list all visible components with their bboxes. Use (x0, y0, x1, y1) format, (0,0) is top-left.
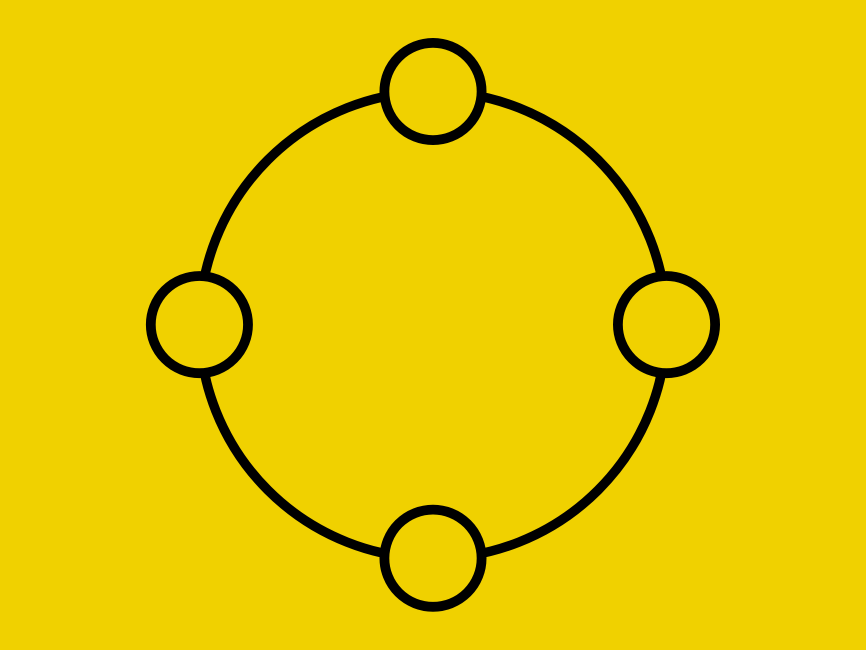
large ring (200, 92, 666, 558)
node: bottom (384, 510, 482, 607)
node: left (151, 276, 248, 373)
node: top (384, 43, 482, 140)
node: right (618, 276, 715, 373)
